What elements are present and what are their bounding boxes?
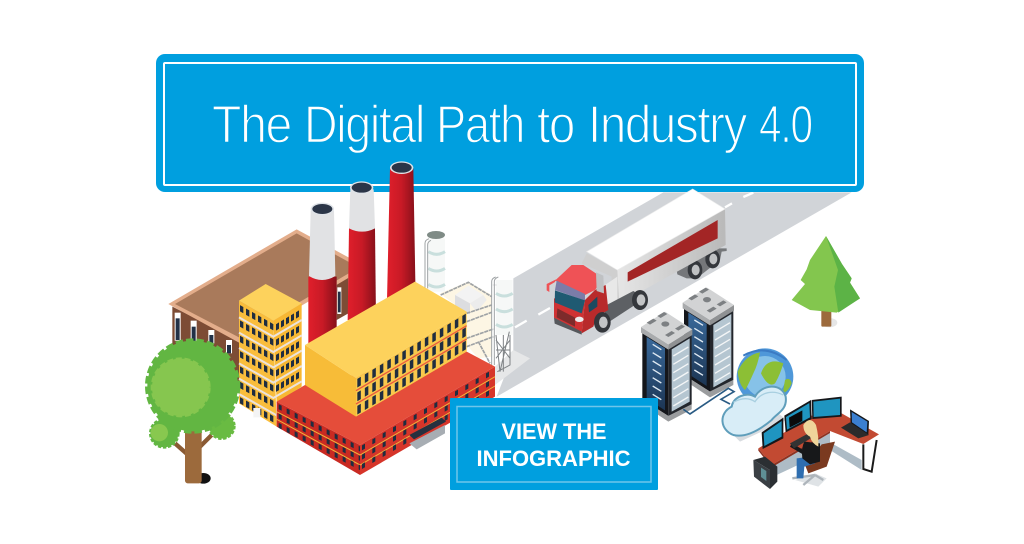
factory main block xyxy=(277,282,495,475)
title text xyxy=(212,96,812,154)
entrance canopy xyxy=(409,418,446,449)
silo tall xyxy=(425,231,445,292)
operator workstation xyxy=(753,397,879,489)
big yellow block xyxy=(305,282,467,417)
silo short xyxy=(492,277,513,365)
server racks xyxy=(641,287,734,422)
title text: 4.0 xyxy=(759,96,812,154)
pine tree xyxy=(792,236,860,327)
tractor chassis and wheels xyxy=(603,277,648,322)
operator xyxy=(790,420,835,487)
title text: The xyxy=(212,96,291,154)
yellow tower xyxy=(239,284,302,427)
chimney left xyxy=(308,203,337,347)
lattice tower xyxy=(496,332,510,372)
network cables xyxy=(683,388,734,414)
monitors xyxy=(762,397,869,449)
globe and cloud xyxy=(722,348,793,442)
tower bands xyxy=(239,317,302,415)
chimney right xyxy=(387,161,416,300)
title banner xyxy=(156,54,864,192)
button text xyxy=(476,419,631,471)
tree left xyxy=(147,341,238,484)
cab xyxy=(547,265,611,335)
title text: Path xyxy=(436,96,524,154)
button text: INFOGRAPHIC xyxy=(476,446,631,471)
red base building xyxy=(277,352,495,475)
factory xyxy=(168,161,416,383)
road lane markings xyxy=(515,193,753,327)
view the infographic button xyxy=(450,398,658,490)
button text: VIEW THE xyxy=(502,419,606,444)
brown building xyxy=(168,229,353,383)
cloud xyxy=(722,387,787,442)
globe xyxy=(737,348,793,405)
title text: to xyxy=(537,96,574,154)
scaffold platforms xyxy=(440,282,493,363)
road xyxy=(497,192,852,397)
chimney middle xyxy=(348,181,376,320)
trailer xyxy=(582,189,727,303)
title text: Digital xyxy=(304,96,424,154)
truck xyxy=(547,189,727,335)
server rack right xyxy=(683,287,734,397)
tower PC xyxy=(753,457,777,489)
desk xyxy=(758,413,879,475)
server rack left xyxy=(641,312,692,422)
title text: Industry xyxy=(588,96,748,154)
industrial plant with silos and scaffolding xyxy=(425,231,530,385)
